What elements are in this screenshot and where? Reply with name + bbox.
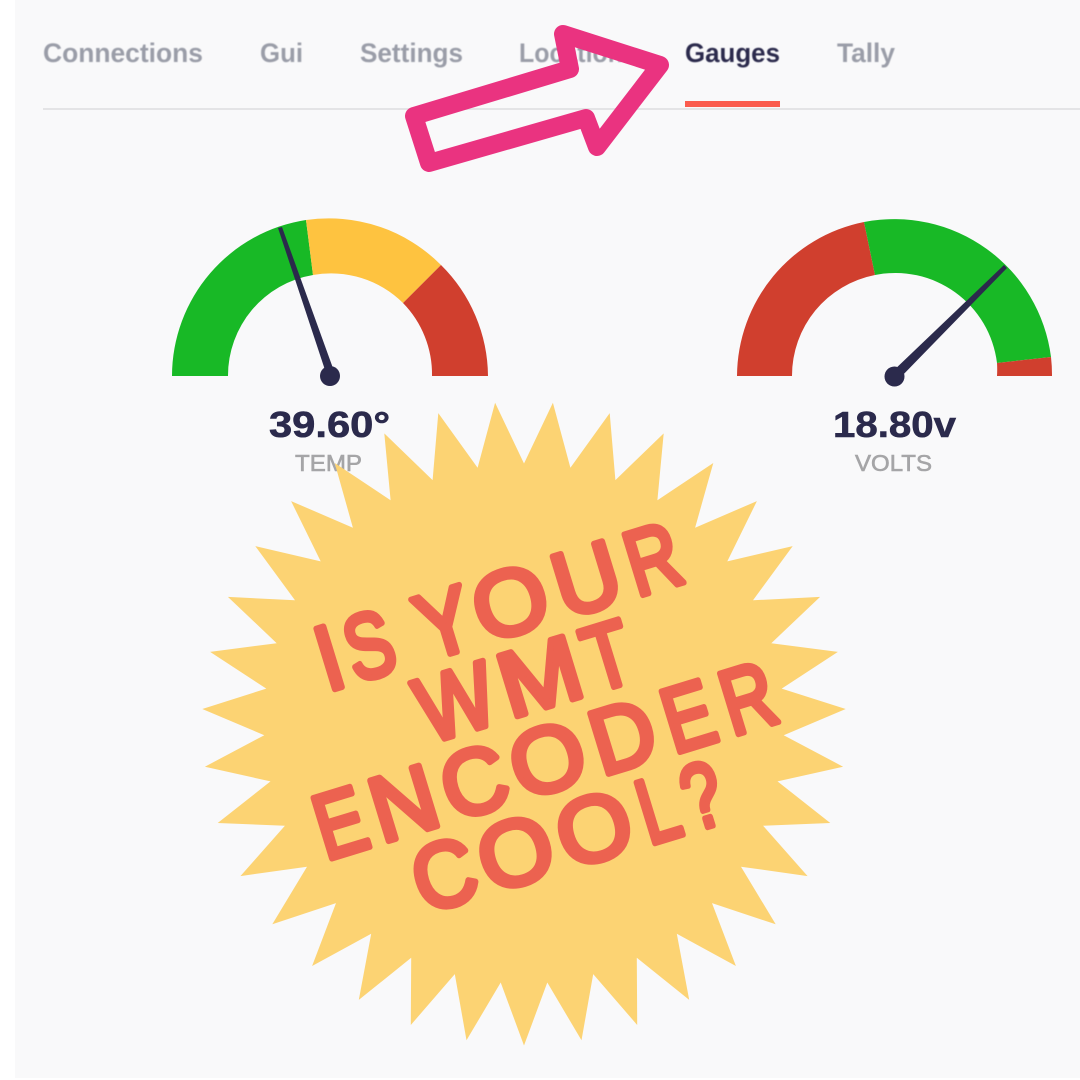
tab bar xyxy=(43,38,895,68)
headline line 3: E xyxy=(301,766,379,879)
headline line 1: S xyxy=(332,591,407,702)
gauge arc: green zone xyxy=(172,220,313,376)
gauge arc: red zone xyxy=(403,265,488,376)
headline line 4: O xyxy=(543,768,645,889)
headline line 3: E xyxy=(649,660,727,773)
headline line 2: W xyxy=(404,642,508,763)
gauge: temperature xyxy=(172,218,488,476)
temperature value: 39.60° xyxy=(269,404,390,445)
headline line 2: T xyxy=(570,600,645,712)
headline line 2: M xyxy=(486,616,594,738)
tab: Connections: Connections xyxy=(43,38,203,68)
headline line 1: Y xyxy=(403,566,485,680)
volts label: VOLTS xyxy=(855,450,932,476)
gauge: volts xyxy=(737,219,1052,476)
tab: Gui: Gui xyxy=(260,38,303,68)
gauge arc: yellow zone xyxy=(306,218,441,303)
headline line 4: L xyxy=(625,755,692,865)
headline line 1: U xyxy=(540,521,633,638)
tab: Settings: Settings xyxy=(360,38,463,68)
headline line 4 xyxy=(399,741,736,933)
starburst badge xyxy=(202,403,846,1046)
gauge needle xyxy=(884,265,1007,386)
headline line 4: C xyxy=(399,816,489,933)
arrow pointing at Gauges tab xyxy=(414,34,660,163)
headline line 3 xyxy=(301,641,788,880)
tab: Tally: Tally xyxy=(837,38,895,68)
tab: Gauges (active): Gauges xyxy=(685,38,780,68)
headline line 1 xyxy=(303,501,693,711)
headline line 1: R xyxy=(612,502,693,616)
headline line 4: O xyxy=(465,792,566,913)
gauge needle xyxy=(278,227,340,386)
headline line 3: C xyxy=(428,724,521,841)
headline: is your WMT encoder cool? xyxy=(301,501,788,933)
headline line 1: O xyxy=(460,542,561,662)
active tab underline xyxy=(685,101,780,107)
gauge arc: high red zone xyxy=(997,357,1052,376)
headline line 1: I xyxy=(303,605,355,710)
temperature label: TEMP xyxy=(295,450,362,476)
gauge arc: green zone xyxy=(864,219,1051,363)
volts value: 18.80v xyxy=(833,404,956,445)
headline line 4: ? xyxy=(669,741,736,851)
headline line 2 xyxy=(404,600,645,763)
tab: Location: Location xyxy=(519,38,623,68)
headline line 3: R xyxy=(708,641,788,755)
gauge arc: low red zone xyxy=(737,222,875,376)
headline line 3: D xyxy=(577,678,669,795)
headline line 3: O xyxy=(497,699,598,819)
headline line 3: N xyxy=(357,745,450,862)
